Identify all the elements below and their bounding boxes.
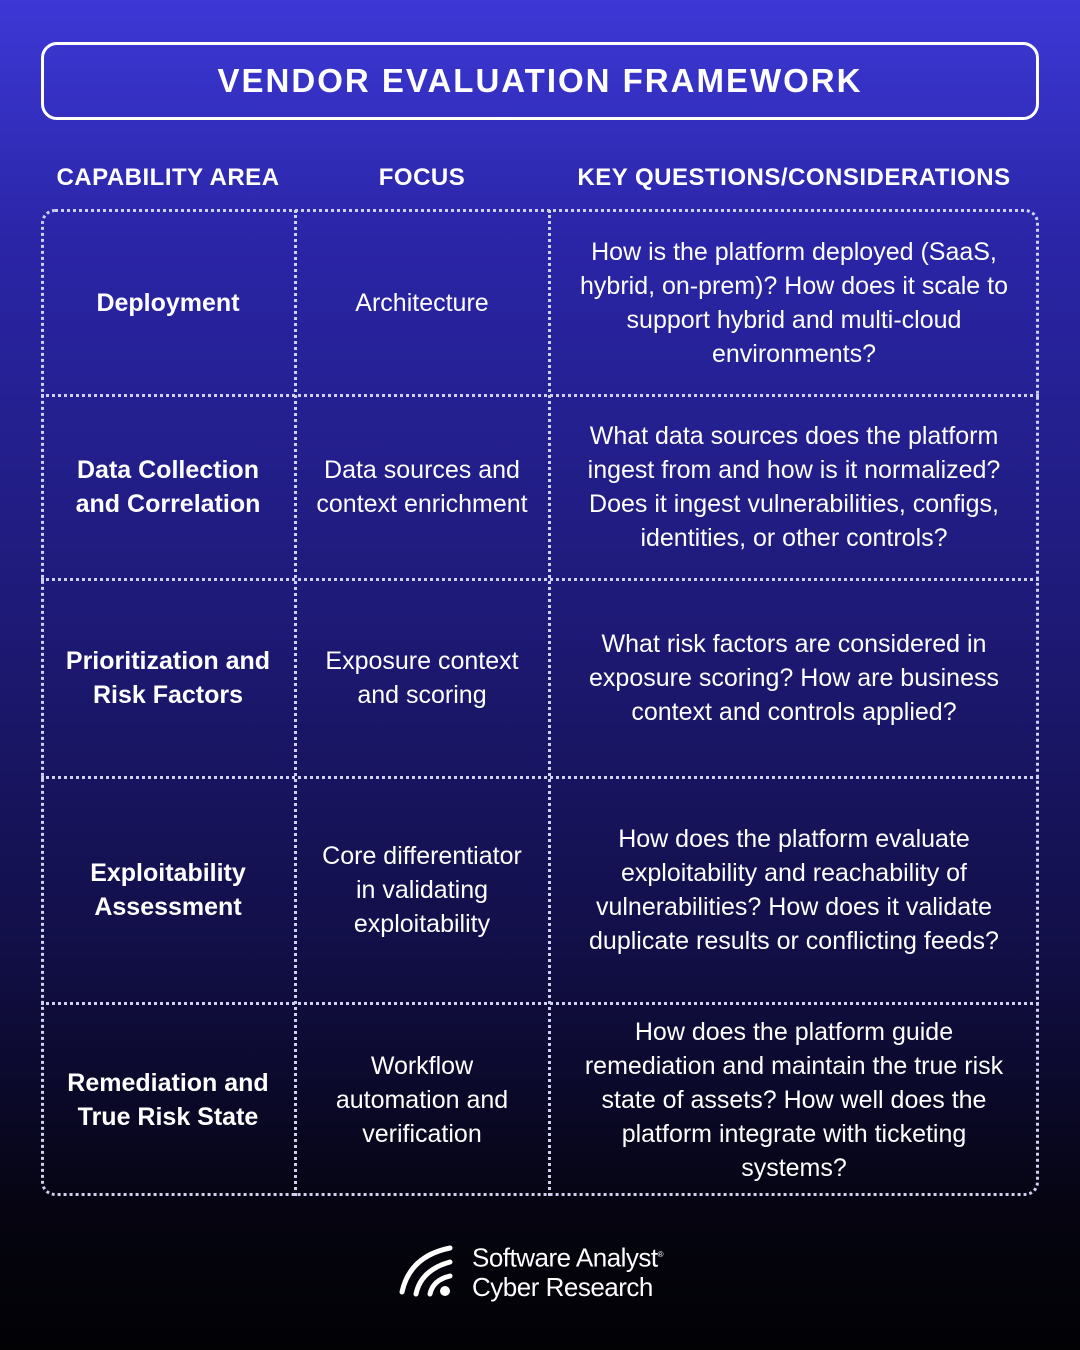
table bbox=[41, 209, 1039, 1196]
row 3: prioritization: Risk Factors bbox=[93, 681, 243, 709]
row 5: remediation: True Risk State bbox=[78, 1102, 258, 1130]
row 4: exploitability: Assessment bbox=[94, 893, 242, 921]
title: VENDOR EVALUATION FRAMEWORK bbox=[218, 62, 862, 99]
logo bbox=[400, 1243, 664, 1302]
row 3: prioritization: What risk factors are considered in exposure scoring? How are business context and controls applied? bbox=[589, 630, 999, 726]
row 4: exploitability bbox=[90, 825, 999, 955]
row 2: data collection bbox=[76, 422, 1000, 552]
icon: wifi signal bbox=[400, 1246, 452, 1296]
row 1: deployment: Deployment bbox=[96, 288, 240, 316]
header: key questions: KEY QUESTIONS/CONSIDERATIONS bbox=[577, 164, 1011, 191]
row 5: remediation: automation and bbox=[336, 1086, 508, 1114]
row 3: prioritization bbox=[66, 630, 999, 726]
row 4: exploitability: Core differentiator bbox=[322, 842, 522, 870]
row 4: exploitability: in validating bbox=[356, 876, 488, 904]
row 4: exploitability: Exploitability bbox=[90, 859, 246, 887]
header: capability area: CAPABILITY AREA bbox=[56, 164, 280, 191]
row 5: remediation: verification bbox=[362, 1120, 482, 1148]
row 3: prioritization: and scoring bbox=[357, 681, 487, 709]
row 1: deployment: How is the platform deployed (SaaS, hybrid, on-prem)? How does it scale to support hybrid and multi-cloud environments? bbox=[580, 238, 1008, 368]
header: focus: FOCUS bbox=[379, 164, 465, 191]
row 4: exploitability: exploitability bbox=[354, 910, 490, 938]
logo text bbox=[472, 1243, 664, 1302]
row 5: remediation: How does the platform guide remediation and maintain the true risk state of assets? How well does the platform integrate with ticketing systems? bbox=[585, 1018, 1003, 1182]
row 5: remediation: Remediation and bbox=[67, 1068, 269, 1096]
logo text: Software Analyst® bbox=[472, 1243, 663, 1273]
row 2: data collection: Data Collection bbox=[77, 456, 259, 484]
row 5: remediation bbox=[67, 1018, 1004, 1182]
row 4: exploitability: How does the platform evaluate exploitability and reachability of vulnerabilities? How does it validate duplicate results or conflicting feeds? bbox=[589, 825, 999, 955]
row 2: data collection: and Correlation bbox=[76, 490, 260, 518]
row 2: data collection: Data sources and context enrichment bbox=[316, 456, 528, 518]
row 1: deployment: Architecture bbox=[355, 288, 489, 316]
row 5: remediation: Workflow bbox=[371, 1052, 473, 1080]
row 3: prioritization: Exposure context bbox=[325, 647, 519, 675]
row 2: data collection: What data sources does the platform ingest from and how is it normalized? Does it ingest vulnerabilities, configs, identities, or other controls? bbox=[588, 422, 1000, 552]
row 1: deployment bbox=[96, 238, 1008, 368]
logo text: Cyber Research bbox=[472, 1272, 653, 1302]
row 3: prioritization: Prioritization and bbox=[66, 647, 270, 675]
title bbox=[41, 42, 1039, 120]
